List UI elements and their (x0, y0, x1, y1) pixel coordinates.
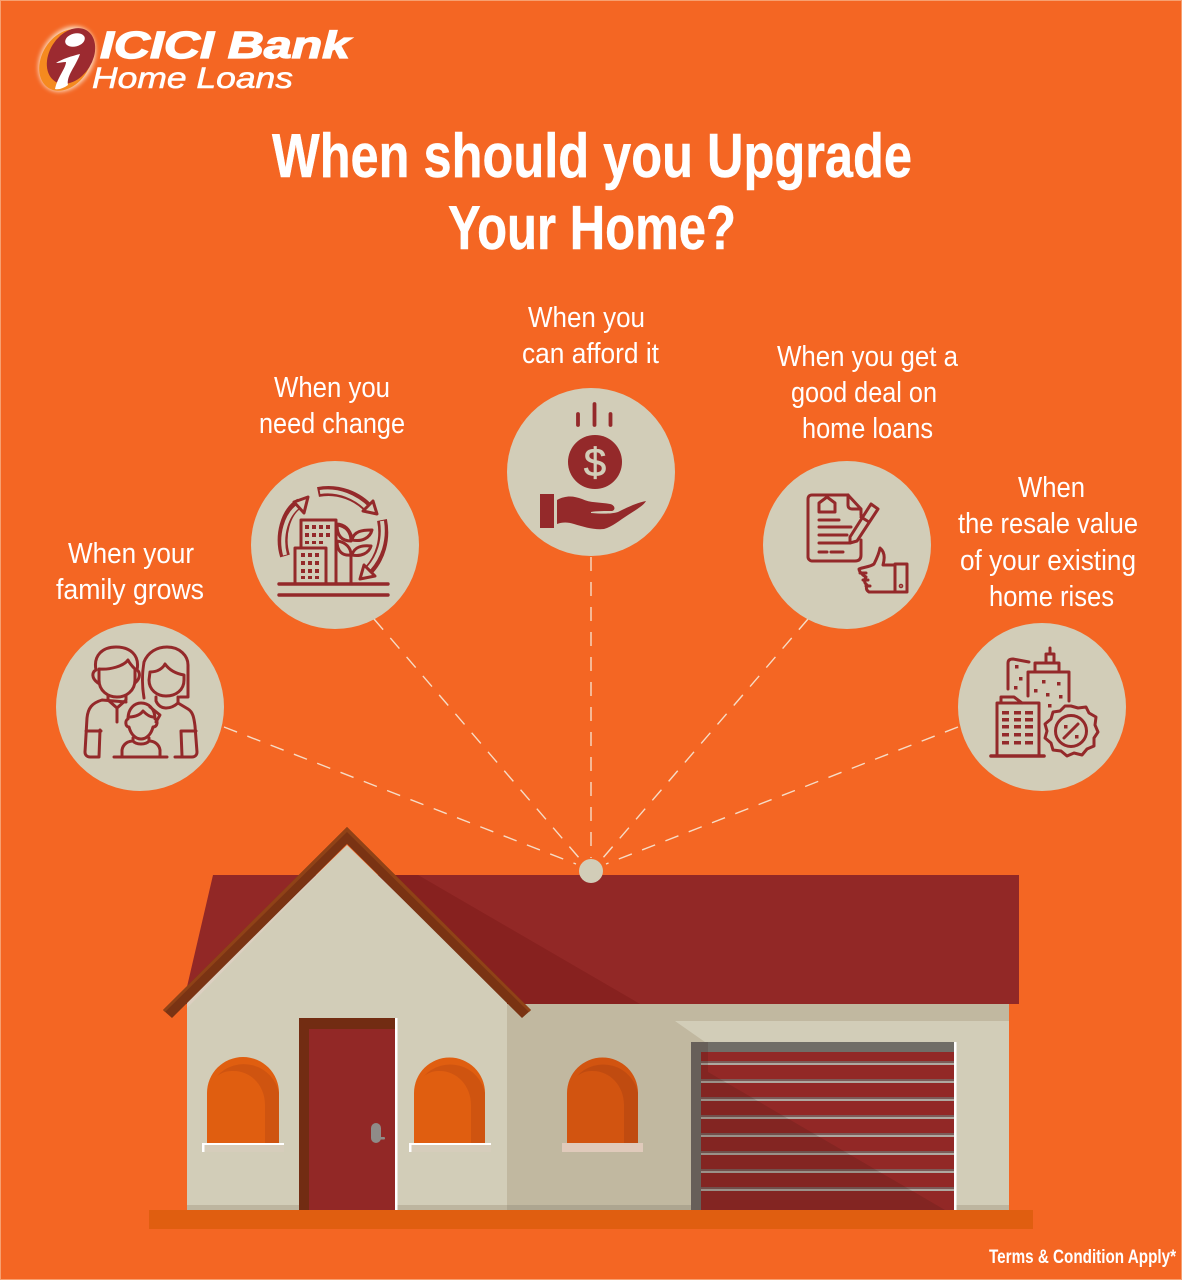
item: when your family grows: When your (68, 538, 194, 570)
roof shadow (395, 875, 640, 1004)
item: when you get a good deal on home loans: home loans (802, 413, 933, 445)
title: When should you Upgrade (272, 122, 912, 191)
title (272, 122, 912, 263)
item: when you get a good deal on home loans (763, 341, 959, 629)
item: when you need change: When you (274, 372, 390, 404)
icon: coin over open hand (540, 404, 646, 529)
window left (202, 1057, 284, 1152)
gable rafters (163, 827, 531, 1018)
logo: ICICI Bank Home Loans: ICICI Bank (100, 25, 352, 67)
item: when your family grows (56, 538, 224, 791)
icon: family (85, 647, 197, 757)
item: when you get a good deal on home loans: good deal on (791, 377, 937, 409)
icon: city and renewal (279, 491, 388, 595)
focal dot (579, 859, 603, 883)
ground (149, 1210, 1033, 1229)
roof (183, 875, 1019, 1004)
gable front wall (187, 845, 507, 1210)
window middle (409, 1058, 491, 1152)
item: when you can afford it: When you (528, 302, 645, 334)
item: when the resale value of your existing home rises: the resale value (958, 508, 1138, 540)
item: when you need change (251, 372, 419, 629)
logo: ICICI Bank Home Loans (26, 16, 352, 102)
item: when you can afford it (507, 302, 675, 556)
item: when the resale value of your existing home rises: When (1018, 472, 1085, 504)
garage wing wall (507, 1004, 1009, 1210)
icon: coin over open hand: $ (584, 441, 606, 485)
icon: city buildings with discount badge (991, 648, 1098, 756)
garage wing lit wall (675, 1021, 1009, 1210)
item: when you need change: need change (259, 408, 405, 440)
item: when you can afford it: can afford it (522, 338, 659, 370)
item: when your family grows: family grows (56, 574, 204, 606)
icon: loan document and thumbs up (808, 495, 907, 592)
item: when you get a good deal on home loans: When you get a (777, 341, 959, 373)
item: when the resale value of your existing home rises: of your existing (960, 545, 1136, 577)
dashed connector lines (224, 557, 958, 864)
item: when the resale value of your existing home rises: home rises (989, 581, 1114, 613)
garage door (691, 1042, 956, 1210)
logo: ICICI Bank Home Loans: Home Loans (92, 62, 293, 95)
house illustration (149, 827, 1033, 1229)
title: Your Home? (448, 194, 736, 263)
window right (562, 1058, 643, 1152)
item: when the resale value of your existing home rises (958, 472, 1138, 791)
front door (299, 1018, 398, 1210)
